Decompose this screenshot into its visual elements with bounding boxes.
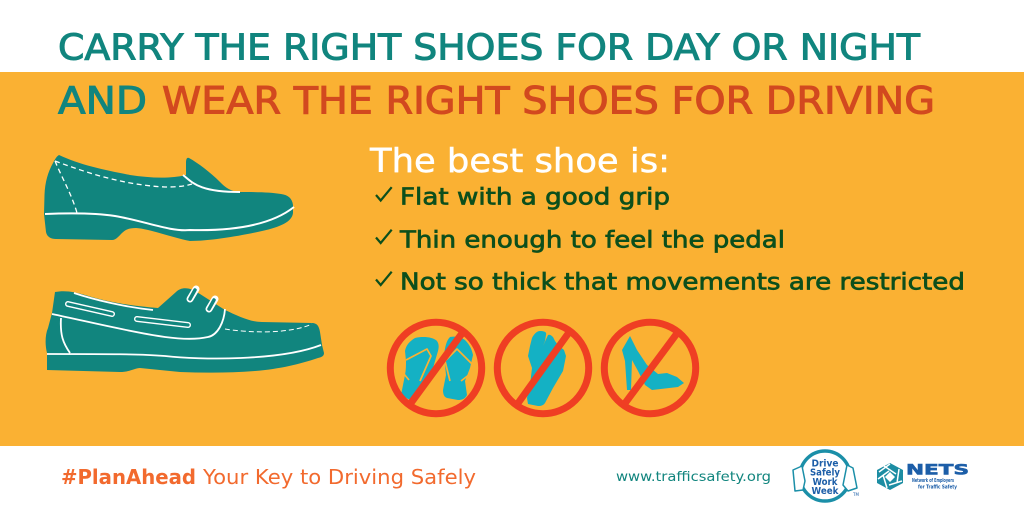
footer url: www.trafficsafety.org	[616, 469, 771, 485]
checklist	[376, 184, 965, 296]
item: thin enough: Thin enough to feel the pedal	[399, 228, 785, 254]
logo: drive safely work week: Safely	[810, 468, 840, 478]
footer tagline	[61, 465, 476, 489]
logo: NETS: for Traffic Safety	[918, 484, 957, 490]
icon: boat shoe	[46, 288, 324, 373]
icon: no high heel	[604, 322, 696, 414]
logo: drive safely work week: TM	[852, 492, 859, 497]
hashtag: #PlanAhead	[61, 465, 196, 489]
logo: NETS: Network of Employers	[912, 478, 954, 484]
tagline text: Your Key to Driving Safely	[202, 465, 476, 489]
icon: no flip-flops	[390, 322, 482, 414]
icon: no bare foot	[497, 322, 589, 414]
panel: orange background	[0, 72, 1024, 446]
heading: the best shoe is: The best shoe is:	[369, 141, 670, 180]
logo: drive safely work week	[793, 451, 859, 501]
title words: wear the right shoes for driving: WEAR THE RIGHT SHOES FOR DRIVING	[162, 80, 935, 122]
title word: AND: AND	[58, 80, 147, 122]
logo: NETS: NETS	[906, 462, 969, 478]
title line 2	[58, 80, 935, 122]
item: flat with a good grip: Flat with a good grip	[400, 184, 670, 210]
logo: drive safely work week: Work	[812, 477, 838, 488]
logo: drive safely work week: Drive	[812, 458, 839, 470]
logo: NETS	[877, 462, 969, 490]
title line 1: CARRY THE RIGHT SHOES FOR DAY OR NIGHT	[58, 28, 921, 68]
logo: drive safely work week: Week	[812, 486, 839, 497]
icon: loafer shoe	[44, 155, 294, 241]
item: not so thick: Not so thick that movements are restricted	[400, 270, 965, 296]
